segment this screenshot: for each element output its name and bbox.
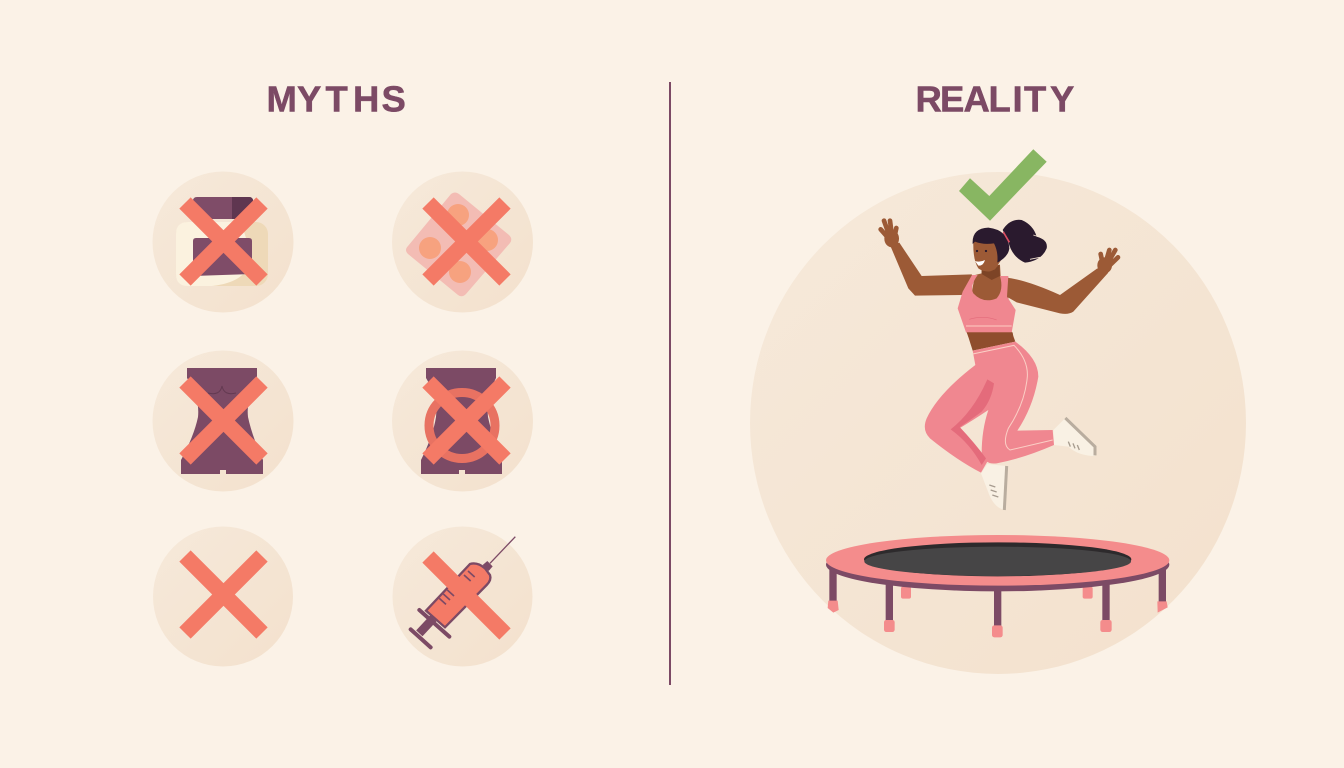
left arm <box>890 243 975 296</box>
sports top <box>958 275 1016 332</box>
myth icon: torso with ring crossed out <box>392 350 533 492</box>
icon: green check mark <box>959 149 1047 221</box>
center divider <box>669 82 671 685</box>
left hand <box>881 221 896 240</box>
right arm <box>1007 268 1108 314</box>
reality background circle <box>750 172 1246 674</box>
myth icon: pills blister crossed out <box>392 172 533 312</box>
heading: myths: MYTHS <box>266 78 406 120</box>
myth icon: empty circle crossed out <box>153 526 293 666</box>
head <box>973 240 1004 271</box>
heading: reality: REALITY <box>916 78 1074 120</box>
woman jumping <box>881 220 1118 510</box>
myth icon: syringe crossed out <box>392 526 532 666</box>
trampoline <box>826 535 1169 637</box>
neck and chest <box>970 265 1008 302</box>
ponytail <box>1003 220 1047 263</box>
right hand <box>1101 250 1118 267</box>
arms, torso and head <box>881 220 1118 349</box>
myth icon: supplement jar crossed out <box>152 172 294 312</box>
legs and shoes <box>925 332 1095 510</box>
myth icon: torso crossed out <box>152 350 294 492</box>
